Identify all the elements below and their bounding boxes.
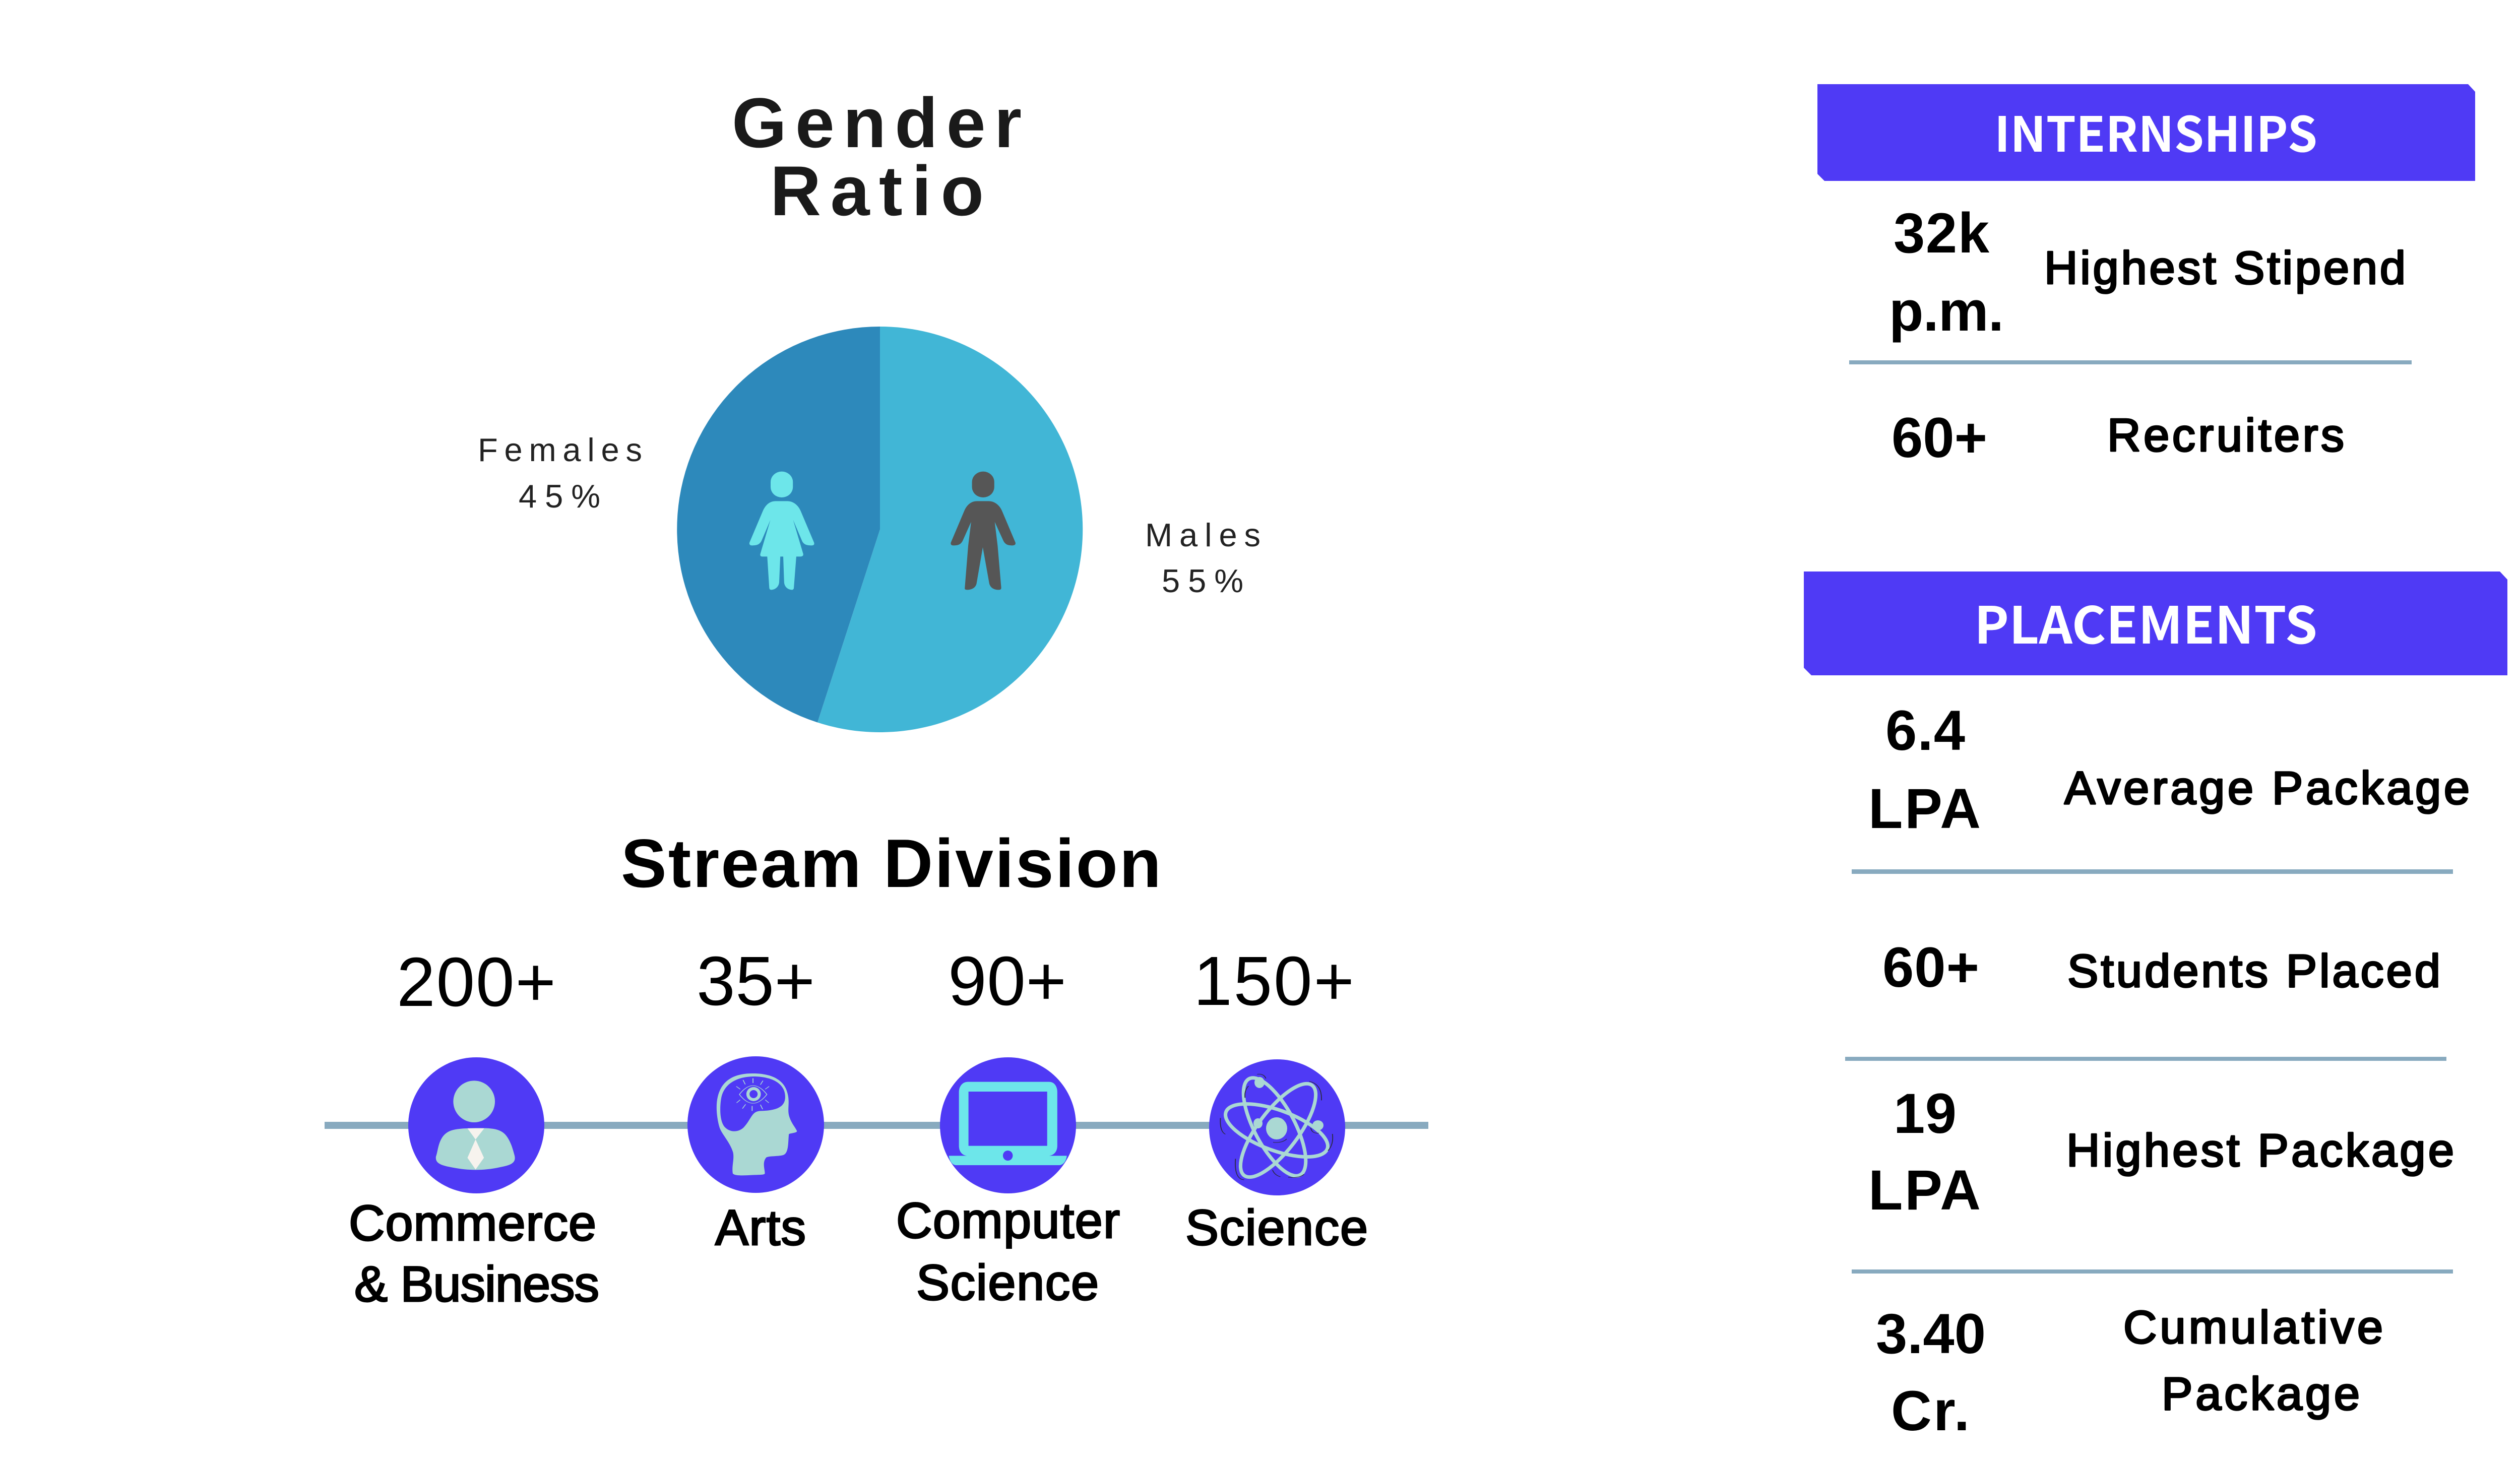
stat: cumulative package: Cumulative <box>2123 1302 2383 1353</box>
stream labels <box>349 1192 1368 1312</box>
label: females 45%: 45% <box>519 478 600 515</box>
stream labels: Science <box>1185 1199 1368 1255</box>
banner: internships: INTERNSHIPS <box>1994 96 2317 166</box>
stat: highest stipend: Highest Stipend <box>2044 242 2406 294</box>
timeline bar <box>325 1122 1428 1129</box>
label: females 45% <box>478 431 642 515</box>
title: Gender Ratio: Ratio <box>770 151 984 230</box>
stream labels: Arts <box>715 1199 806 1255</box>
label: males 55%: 55% <box>1162 562 1243 599</box>
banner: internships <box>1817 84 2475 181</box>
stat: recruiters <box>1892 406 2344 469</box>
stat: highest package: LPA <box>1868 1159 1981 1222</box>
panel: stream division <box>325 825 1428 1312</box>
stat: highest package <box>1868 1082 2454 1222</box>
stream labels: Science <box>916 1254 1099 1310</box>
stat: recruiters: 60+ <box>1892 406 1987 469</box>
stat: average package: LPA <box>1868 777 1981 840</box>
stat: students placed <box>1882 936 2440 999</box>
stat: highest stipend: p.m. <box>1889 280 2004 343</box>
stat: cumulative package <box>1876 1302 2383 1442</box>
stream labels: Computer <box>896 1192 1120 1248</box>
stat: students placed: 60+ <box>1882 936 1979 999</box>
heading: Stream Division: Stream Division <box>621 825 1161 902</box>
title: Gender Ratio: Gender <box>732 83 1022 162</box>
icon: science atom <box>1209 1059 1345 1195</box>
icon: arts head with eye <box>687 1056 824 1193</box>
stream counts: 90+ <box>948 942 1066 1020</box>
stat: students placed: Students Placed <box>2067 945 2440 997</box>
stat: average package: 6.4 <box>1885 699 1965 762</box>
stat: highest stipend: 32k <box>1894 202 1990 265</box>
label: females 45%: Females <box>478 431 642 468</box>
stat: average package <box>1868 699 2470 840</box>
label: males 55% <box>1145 517 1261 599</box>
icon: male figure <box>951 472 1016 590</box>
panel: placements <box>1804 571 2507 1442</box>
stat: cumulative package: Cr. <box>1891 1379 1970 1442</box>
icon: computer science laptop <box>940 1057 1076 1193</box>
stream counts: 35+ <box>697 942 815 1020</box>
icon: female figure <box>749 472 814 590</box>
panel: internships <box>1817 84 2475 469</box>
stream labels: Commerce <box>349 1195 596 1251</box>
stat: cumulative package: 3.40 <box>1876 1302 1986 1365</box>
stream labels: & Business <box>354 1256 599 1312</box>
stat: recruiters: Recruiters <box>2107 410 2344 461</box>
stream counts: 200+ <box>397 943 556 1021</box>
stream counts: 150+ <box>1193 942 1354 1020</box>
stream counts <box>397 942 1354 1021</box>
stat: highest package: 19 <box>1894 1082 1957 1145</box>
icon: commerce and business <box>408 1057 544 1193</box>
panel: gender ratio <box>478 83 1261 732</box>
pie chart: gender split <box>677 327 1083 732</box>
stat: cumulative package: Package <box>2162 1368 2360 1420</box>
stat: average package: Average Package <box>2064 762 2470 814</box>
banner: placements <box>1804 571 2507 675</box>
label: males 55%: Males <box>1145 517 1261 553</box>
stat: highest stipend <box>1889 202 2406 343</box>
title: Gender Ratio <box>732 83 1022 230</box>
banner: placements: PLACEMENTS <box>1974 585 2317 659</box>
stat: highest package: Highest Package <box>2066 1125 2454 1176</box>
